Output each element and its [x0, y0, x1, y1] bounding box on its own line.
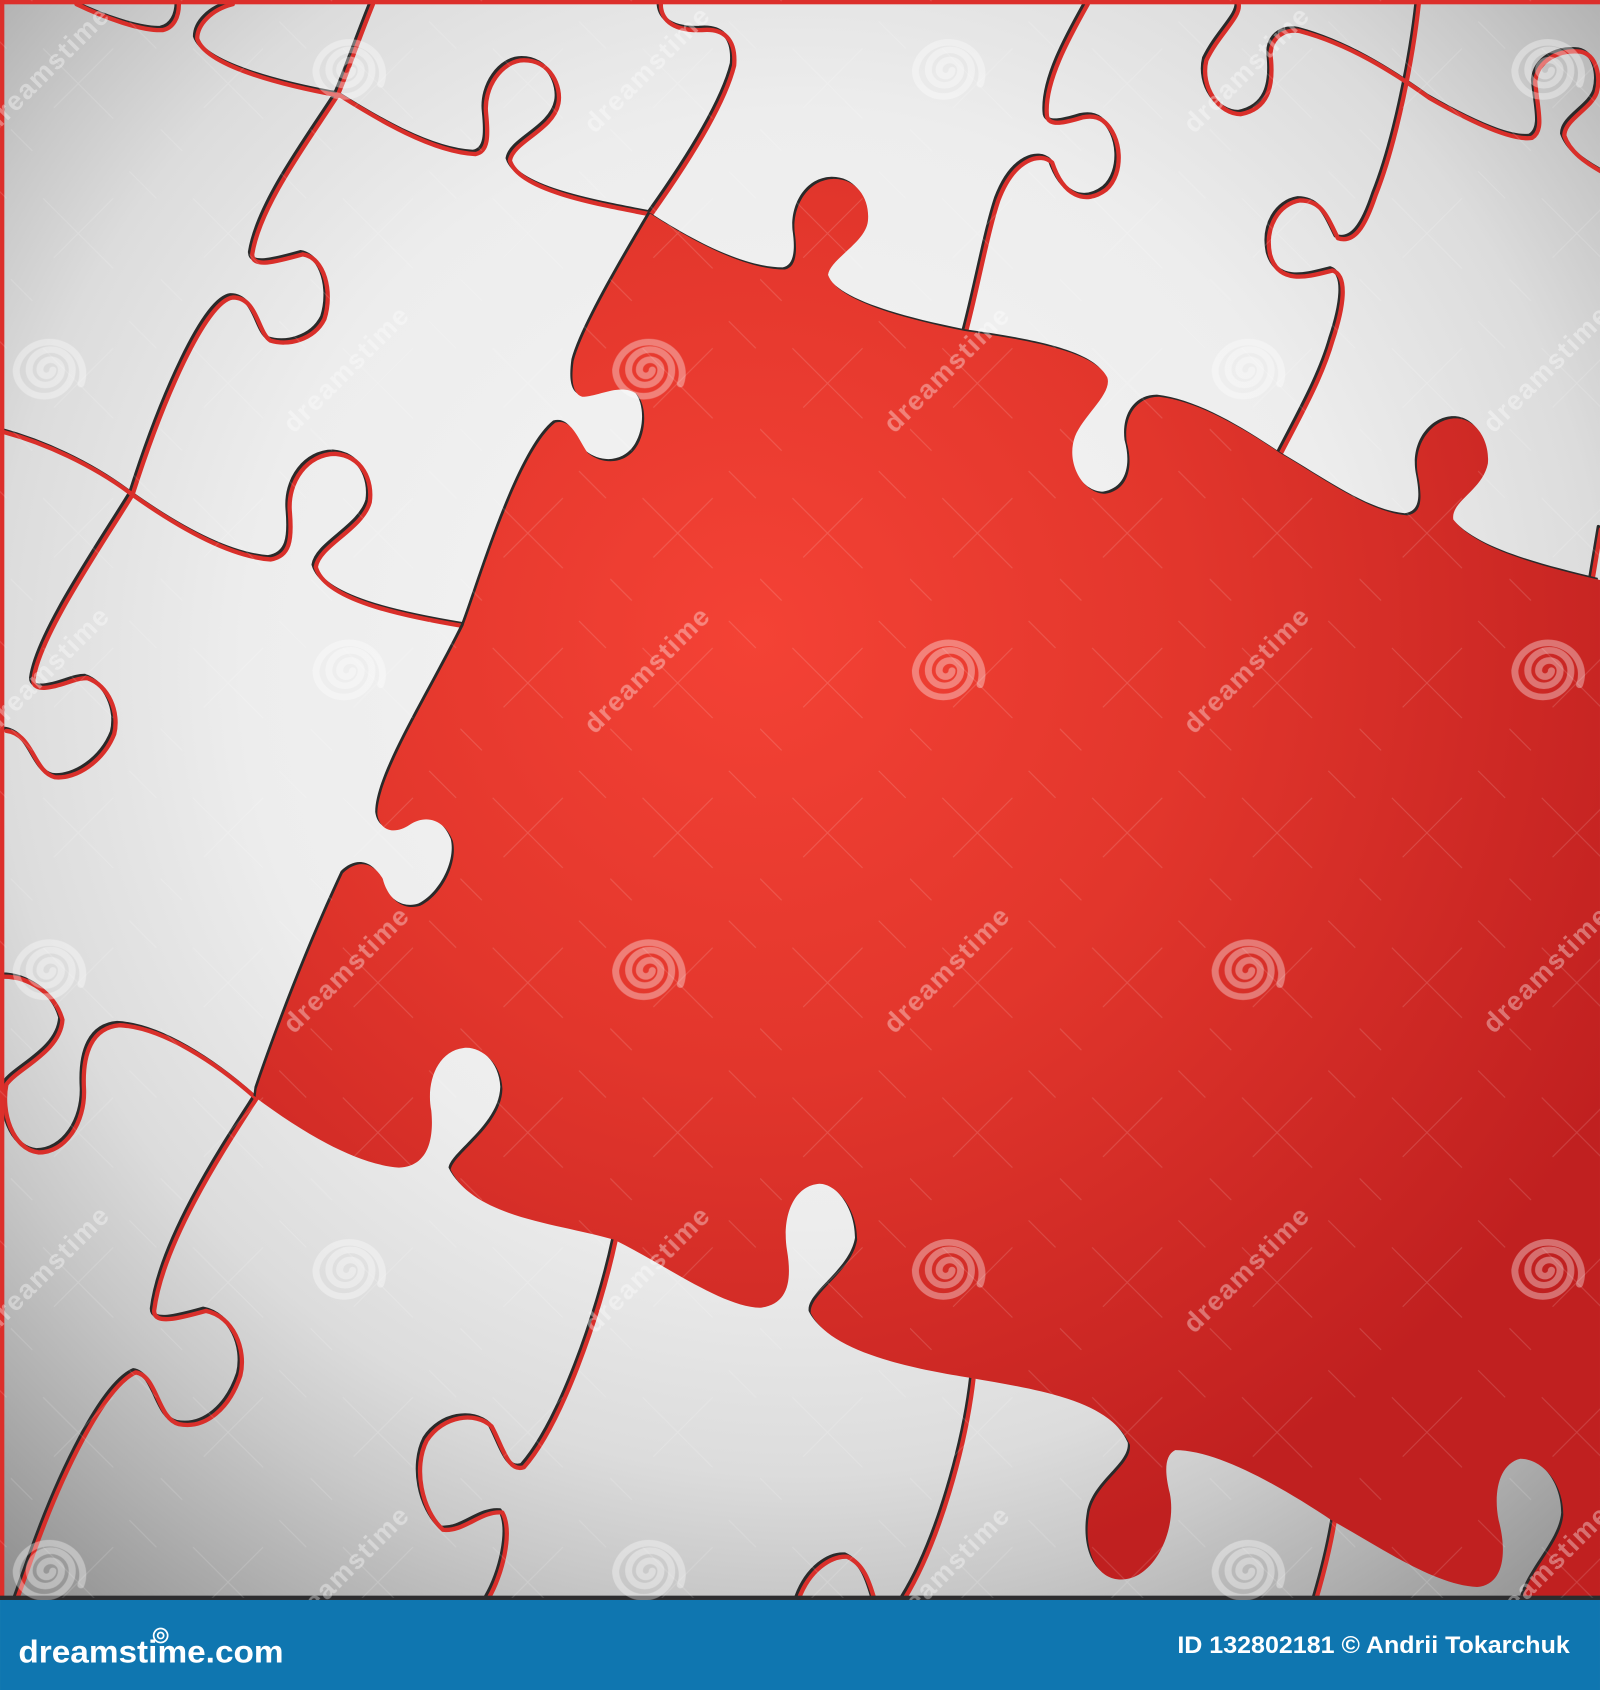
watermark: diagonal text: dreamstime [877, 900, 1016, 1039]
red puzzle pieces: central shape [253, 177, 1600, 1598]
footer credit text: ID 132802181 © Andrii Tokarchuk [1177, 1633, 1571, 1659]
footer logo text: dreamstime.com [18, 1635, 284, 1670]
watermark: diagonal text: dreamstime [578, 1200, 716, 1338]
watermark: diagonal text: dreamstime [877, 1499, 1016, 1638]
watermark: diagonal text: dreamstime [578, 600, 716, 739]
watermark: diagonal text: dreamstime [277, 1499, 416, 1638]
watermark: diagonal text: dreamstime [877, 299, 1016, 438]
watermark: diagonal text: dreamstime [1177, 1200, 1316, 1338]
watermark: diagonal text: dreamstime [578, 0, 716, 139]
watermark: diagonal text: dreamstime [1177, 600, 1316, 739]
footer band [0, 1600, 1600, 1690]
watermark: diagonal text: dreamstime [277, 900, 416, 1039]
watermark: diagonal text: dreamstime [277, 299, 416, 438]
icon: footer spiral logo [154, 1629, 168, 1643]
watermark: diagonal text: dreamstime [1177, 0, 1316, 139]
